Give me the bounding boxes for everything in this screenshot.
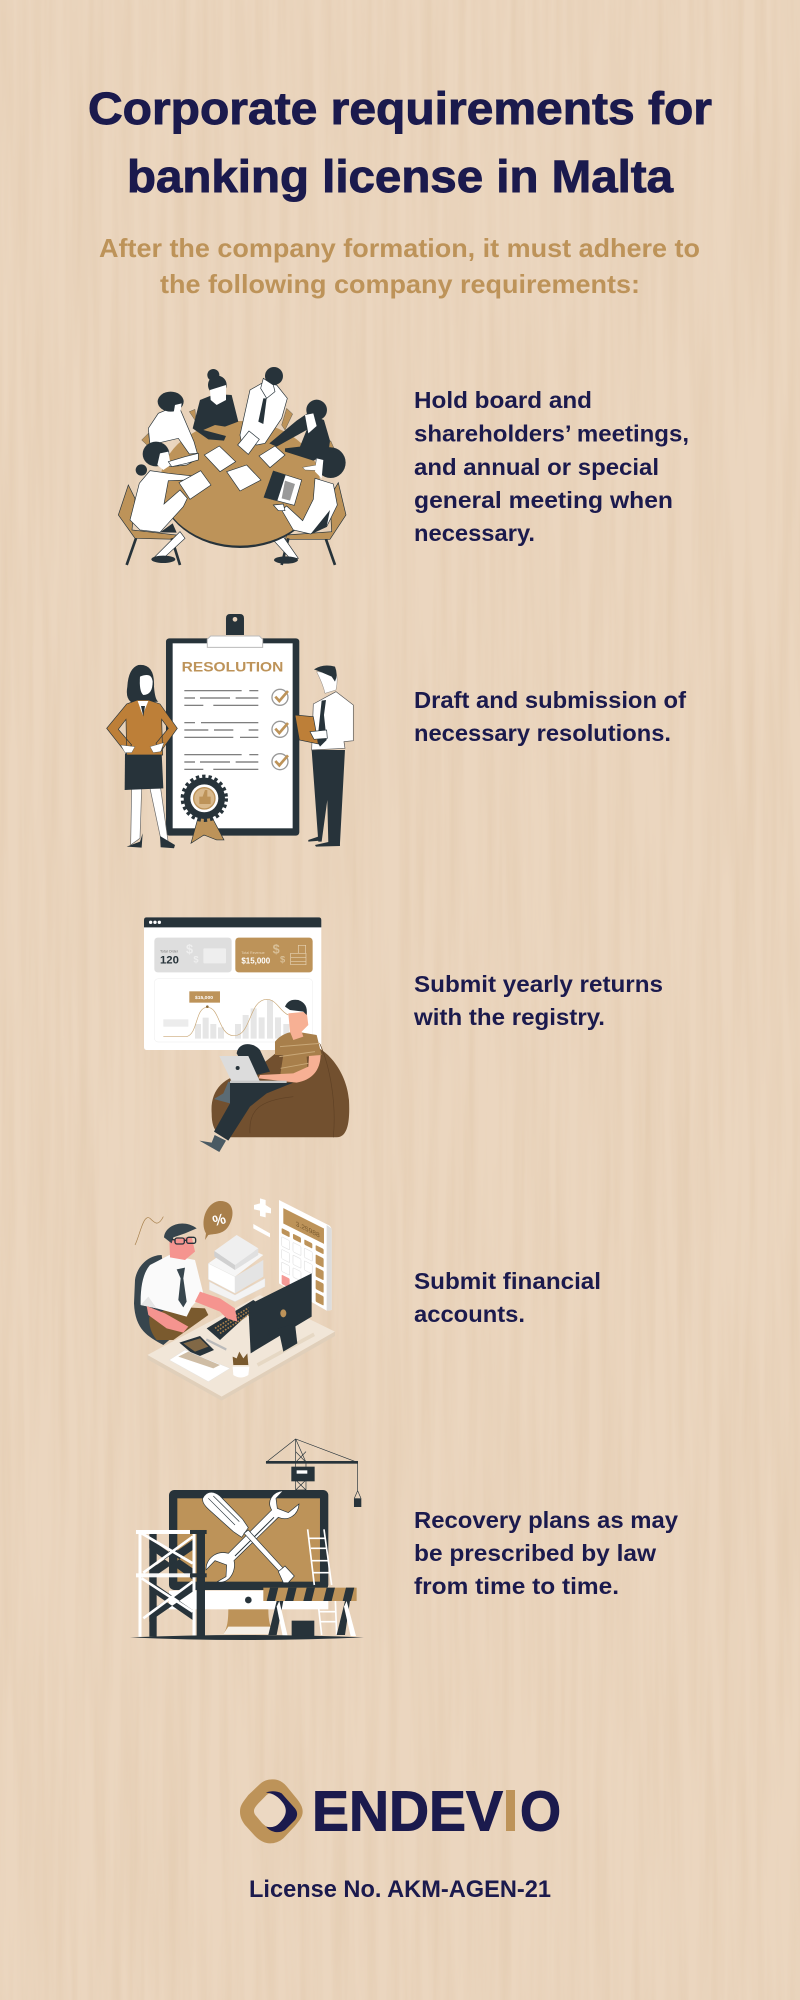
icon: construction around computer with tools [130,1439,364,1640]
subtitle: the following company requirements: [160,269,640,299]
subtitle: After the company formation, it must adhere to [99,233,700,263]
text: requirement 3 [413,971,663,1030]
text: requirement 1: general meeting when [414,487,673,513]
icon: resolution clipboard with two people: RESOLUTION [182,659,283,675]
panel: requirement 3 yearly returns [144,917,663,1152]
icon: resolution clipboard with two people [107,614,353,848]
text: requirement 4: accounts. [414,1301,525,1327]
panel: requirement 2 resolutions [107,614,686,848]
icon: dashboard and man on beanbag: $ [186,942,193,956]
text: requirement 3: with the registry. [413,1004,605,1030]
title [88,83,712,202]
icon: dashboard and man on beanbag: Total Revenue [241,951,265,955]
text: logo wordmark: ENDEV [312,1780,503,1844]
text: requirement 5: Recovery plans as may [414,1507,678,1533]
text: requirement 2 [414,687,686,746]
text: requirement 5 [414,1507,678,1599]
text: requirement 1: Hold board and [414,387,592,413]
icon: board meeting around table [118,367,346,565]
text: requirement 2: Draft and submission of [414,687,686,713]
icon: dashboard and man on beanbag: $15,000 [241,957,271,966]
icon: logo mark [240,1779,303,1843]
subtitle [99,233,700,299]
title: banking license in Malta [127,151,674,202]
icon: dashboard and man on beanbag: $ [193,955,199,965]
panel: requirement 1 meetings [118,367,689,565]
text: requirement 4 [414,1268,601,1327]
icon: accountant at desk with calculator [134,1198,335,1401]
text: requirement 1: necessary. [414,520,535,546]
text: logo wordmark: O [520,1780,561,1844]
text: requirement 1 [414,387,689,546]
icon: dashboard and man on beanbag [144,917,349,1152]
icon: dashboard and man on beanbag: $ [273,942,280,956]
logo: Endevio [240,1779,561,1844]
text: requirement 4: Submit financial [414,1268,601,1294]
license number: License No. AKM-AGEN-21 [249,1876,551,1903]
text: requirement 1: shareholders’ meetings, [414,420,689,446]
icon: accountant at desk with calculator: 3.25988 [296,1221,320,1240]
icon: dashboard and man on beanbag: Total Order [160,949,179,953]
icon: dashboard and man on beanbag: 120 [160,955,179,967]
text: requirement 5: from time to time. [414,1573,619,1599]
text: requirement 3: Submit yearly returns [414,971,663,997]
text: requirement 5: be prescribed by law [414,1540,656,1566]
icon: dashboard and man on beanbag: $ [280,955,286,965]
icon: accountant at desk with calculator: % [211,1211,228,1230]
icon: dashboard and man on beanbag: $15,000 [195,995,213,1001]
text: requirement 2: necessary resolutions. [414,720,671,746]
panel: requirement 5 recovery plans [130,1439,678,1640]
panel: requirement 4 financial accounts [134,1198,601,1401]
title: Corporate requirements for [88,83,712,134]
text: requirement 1: and annual or special [414,454,659,480]
